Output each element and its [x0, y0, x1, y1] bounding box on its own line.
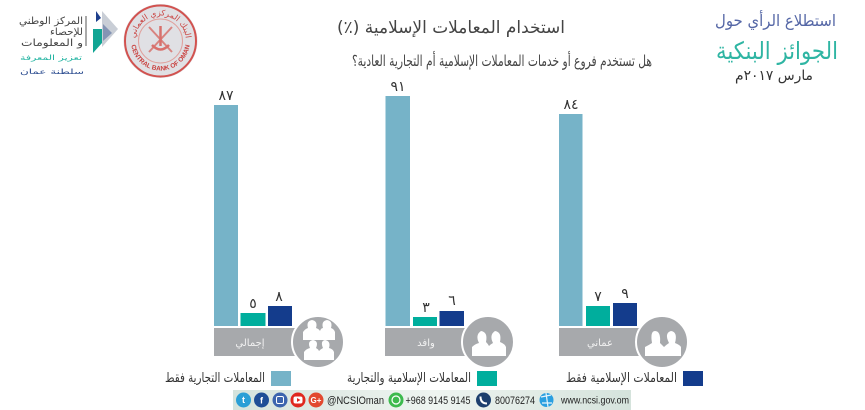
legend: Islamic only: المعاملات الإسلامية فقط — [566, 371, 677, 386]
chart group: total: ٥ — [249, 296, 257, 312]
icon: facebook — [254, 392, 269, 408]
logo: Central Bank of Oman seal: البنك المركزي العماني — [132, 10, 192, 38]
logo: NCSI — [19, 11, 118, 76]
chart group: expatriate: ٦ — [448, 293, 456, 309]
survey heading: استطلاع الرأي حول — [715, 10, 836, 31]
title: استخدام المعاملات الإسلامية (٪) — [337, 18, 565, 38]
chart group: Omani: ٨٤ — [563, 97, 579, 113]
icon: web globe — [540, 393, 554, 407]
icon: youtube — [290, 392, 306, 408]
logo: NCSI: و المعلومات — [21, 38, 83, 49]
phone number: +968 9145 9145 — [406, 395, 470, 407]
survey heading — [715, 10, 838, 84]
toll number: 80076274 — [495, 395, 535, 407]
handle: @NCSIOman — [327, 395, 384, 407]
chart group: expatriate — [385, 79, 514, 368]
footer contact bar — [233, 390, 631, 410]
icon: google plus: G+ — [311, 396, 322, 405]
logo: NCSI: المركز الوطني — [19, 16, 83, 27]
chart group: total: إجمالي — [235, 338, 265, 349]
chart group: Omani: ٧ — [594, 289, 602, 305]
chart group: expatriate: ٩١ — [390, 79, 406, 95]
icon: twitter: t — [242, 395, 245, 405]
icon: facebook: f — [260, 396, 264, 406]
logo: NCSI: تعزيز المعرفة — [20, 54, 82, 62]
icon: instagram — [272, 392, 288, 408]
chart group: expatriate: وافد — [417, 338, 435, 349]
chart group: total: ٨ — [275, 289, 283, 305]
chart group: Omani: عماني — [587, 338, 613, 349]
logo: NCSI: سلطنة عمان — [20, 68, 84, 76]
chart group: Omani — [559, 97, 688, 368]
survey heading: مارس ٢٠١٧م — [735, 68, 813, 84]
chart group: total: ٨٧ — [218, 88, 234, 104]
survey heading: الجوائز البنكية — [716, 37, 838, 65]
chart group: total — [214, 88, 344, 368]
logo: Central Bank of Oman seal: CENTRAL BANK OF OMAN — [132, 44, 190, 71]
logo: Central Bank of Oman seal — [124, 4, 198, 78]
legend: Islamic and commercial: المعاملات الإسلامية والتجارية — [347, 371, 471, 386]
subtitle question: هل تستخدم فروع أو خدمات المعاملات الإسلامية أم التجارية العادية؟ — [352, 51, 652, 70]
logo: NCSI: للإحصاء — [50, 27, 83, 38]
website: www.ncsi.gov.om — [560, 396, 629, 406]
icon: whatsapp — [388, 392, 404, 408]
chart group: expatriate: ٣ — [422, 300, 430, 316]
icon: telephone — [476, 392, 491, 408]
legend: commercial only: المعاملات التجارية فقط — [165, 371, 265, 386]
chart group: Omani: ٩ — [621, 286, 629, 302]
icon: google plus — [308, 392, 324, 408]
icon: twitter — [236, 392, 251, 408]
